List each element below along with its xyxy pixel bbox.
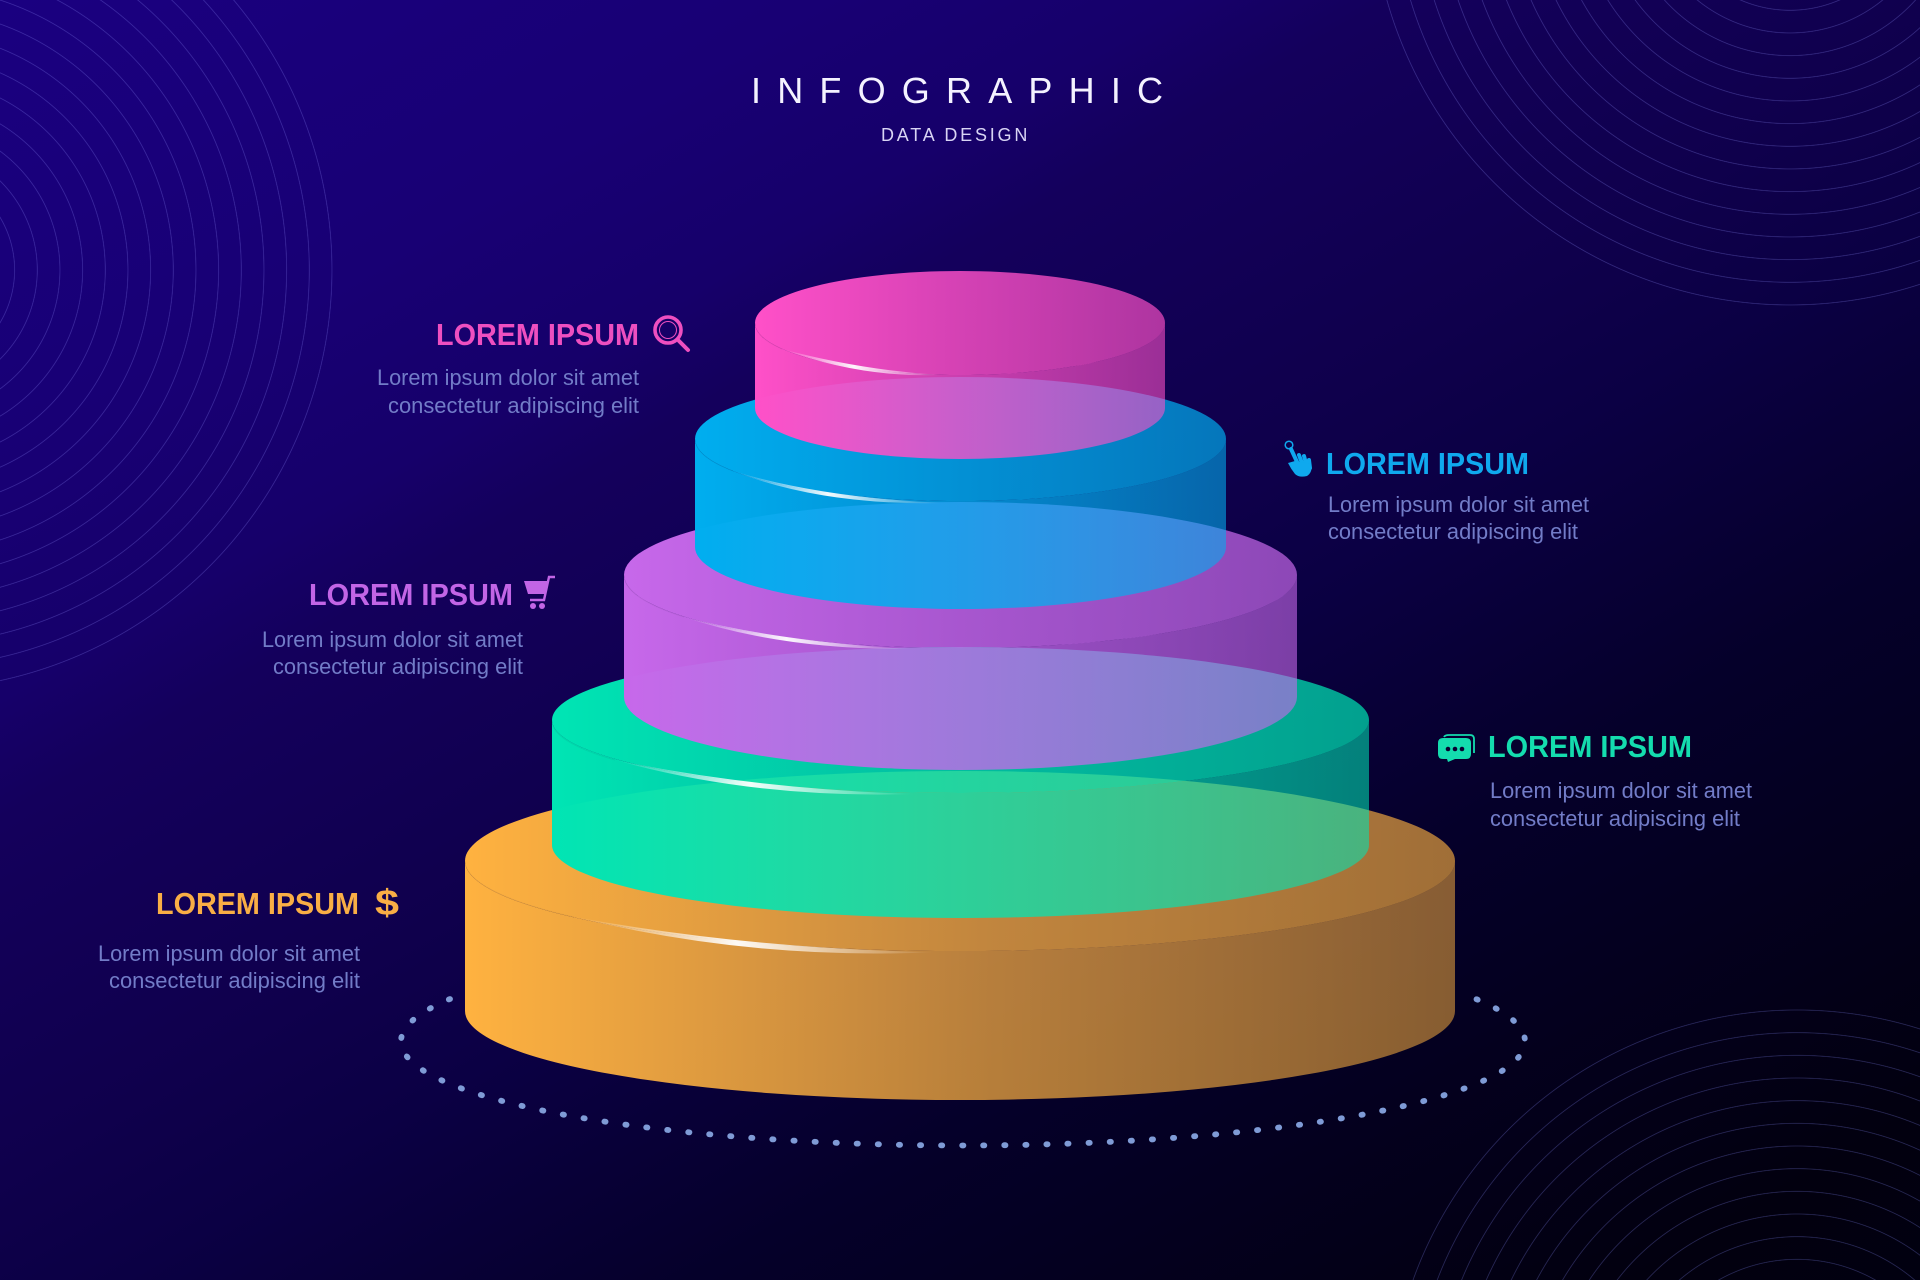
concentric rings: top right [1370,0,1920,307]
label: purple tier [262,577,523,679]
label: green tier [1488,729,1752,831]
label: blue tier: Lorem ipsum dolor sit amet [1328,492,1589,517]
tier 1: pink disc [755,271,1165,459]
label: green tier: Lorem ipsum dolor sit amet [1490,778,1752,803]
dotted ground ellipse [401,994,1525,1145]
label: pink tier: LOREM IPSUM [436,317,639,352]
icon: chat bubbles [1438,735,1474,762]
label: pink tier [377,317,639,418]
label: purple tier: Lorem ipsum dolor sit amet [262,627,523,652]
label: pink tier: Lorem ipsum dolor sit amet [377,365,639,390]
label: blue tier [1326,446,1589,544]
title: INFOGRAPHIC [751,70,1179,111]
icon: pointing hand [1285,441,1312,477]
label: green tier: LOREM IPSUM [1488,729,1692,764]
tier 4: green disc [552,647,1369,918]
subtitle: DATA DESIGN [881,125,1030,145]
label: orange tier: Lorem ipsum dolor sit amet [98,941,360,966]
label: purple tier: LOREM IPSUM [309,577,513,612]
concentric rings: bottom right [1388,1008,1920,1280]
label: orange tier [98,886,360,993]
icon: magnifier [655,317,688,350]
icon: shopping cart [524,577,555,609]
label: purple tier: consectetur adipiscing elit [273,654,523,679]
label: blue tier: consectetur adipiscing elit [1328,519,1578,544]
icon: dollar sign: $ [375,882,399,923]
label: orange tier: consectetur adipiscing elit [109,968,360,993]
tier 2: blue disc [695,377,1226,609]
label: pink tier: consectetur adipiscing elit [388,393,639,418]
label: green tier: consectetur adipiscing elit [1490,806,1740,831]
concentric rings: left [0,0,334,684]
tier 5: orange disc [465,771,1455,1100]
tier 3: purple disc [624,502,1297,770]
label: orange tier: LOREM IPSUM [156,886,359,921]
label: blue tier: LOREM IPSUM [1326,446,1529,481]
